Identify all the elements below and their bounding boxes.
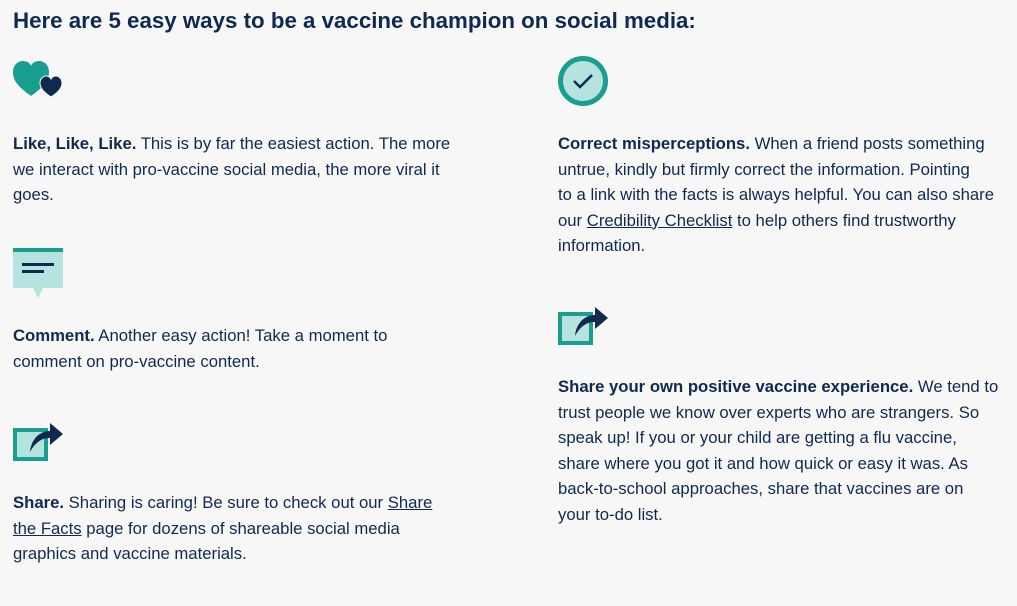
text: comment <box>13 326 387 370</box>
text: like: we interact with pro-vaccine social media, the more viral it <box>13 160 440 178</box>
text: experience: back-to-school approaches, share that vaccines are on <box>558 479 963 498</box>
icon: comment <box>13 248 63 298</box>
text: comment: Comment. Another easy action! Take a moment to <box>13 326 387 345</box>
icon: share left <box>13 423 63 461</box>
text: experience <box>558 377 998 524</box>
text: correct: untrue, kindly but firmly correct the information. Pointing <box>558 160 970 178</box>
text: experience: trust people we know over experts who are strangers. So <box>558 402 979 422</box>
text: correct: our Credibility Checklist to help others find trustworthy <box>558 210 956 230</box>
text: like: Like, Like, Like. This is by far the easiest action. The more <box>13 134 450 153</box>
text: like <box>13 134 450 204</box>
text: correct: information. <box>558 236 645 255</box>
icon: check circle <box>558 56 608 106</box>
text: share: the Facts page for dozens of shareable social media <box>13 518 400 538</box>
text: experience: speak up! If you or your child are getting a flu vaccine, <box>558 428 957 447</box>
title: Here are 5 easy ways to be a vaccine champion on social media: <box>13 8 696 33</box>
text: correct <box>558 134 994 255</box>
text: experience: share where you got it and how quick or easy it was. As <box>558 454 968 472</box>
text: correct: to a link with the facts is always helpful. You can also share <box>558 185 994 204</box>
icon: hearts <box>13 61 62 96</box>
text: correct: Correct misperceptions. When a friend posts something <box>558 134 985 153</box>
text: experience: your to-do list. <box>558 504 663 524</box>
text: share: graphics and vaccine materials. <box>13 544 247 563</box>
text: share <box>13 493 432 563</box>
text: experience: Share your own positive vaccine experience. We tend to <box>558 377 998 396</box>
text: like: goes. <box>13 185 54 204</box>
text: share: Share. Sharing is caring! Be sure to check out our Share <box>13 493 432 512</box>
text: comment: comment on pro-vaccine content. <box>13 352 260 370</box>
icon: share right <box>558 307 608 345</box>
